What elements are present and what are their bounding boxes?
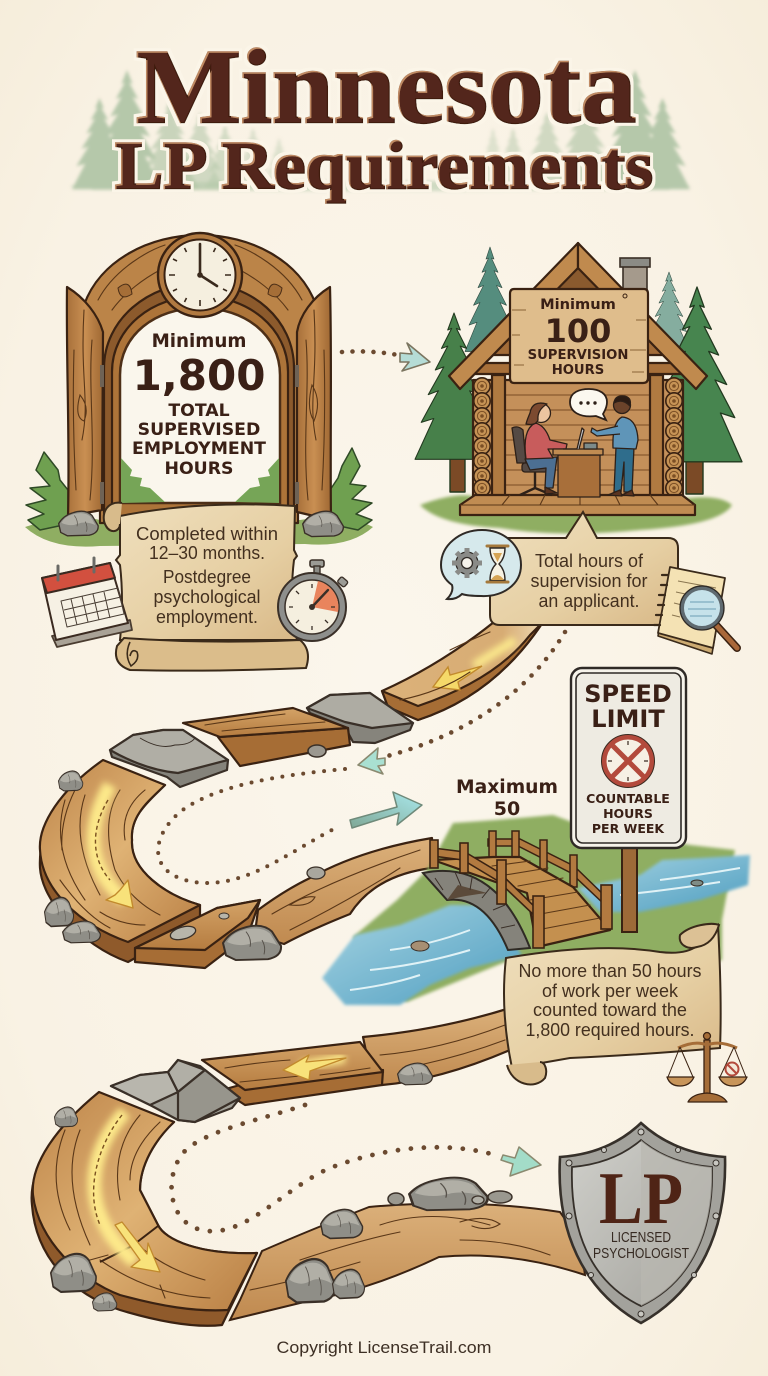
upper scroll curl: [104, 503, 122, 531]
stone outer: [44, 897, 74, 926]
text: minimum 1,800: [132, 331, 266, 479]
text: minimum 1,800: TOTAL: [168, 401, 230, 421]
callout text: Total hours of: [535, 550, 644, 571]
icon: gear and hourglass bubble: [441, 530, 521, 599]
road: upper plank and stones: [110, 622, 543, 787]
arrow: to shield: [501, 1147, 541, 1176]
stone arch: [423, 871, 530, 950]
callout text: [530, 550, 648, 611]
bridge back rail: [488, 831, 607, 905]
stones at doorposts: [59, 511, 98, 536]
text: maximum 50: 50: [494, 798, 520, 820]
panel: callout total hours: [490, 512, 678, 625]
hourglass: [487, 546, 508, 582]
clock: [158, 233, 242, 317]
icon: notebook and magnifier: [654, 567, 737, 654]
speed limit sign: [571, 668, 686, 932]
laptop and desk: [553, 428, 603, 497]
shield text: PSYCHOLOGIST: [593, 1245, 689, 1262]
wooden sign: minimum 100: HOURS: [552, 363, 604, 378]
stone slab: [307, 693, 413, 743]
stone outer low: [63, 921, 100, 943]
sign text top: LIMIT: [591, 705, 665, 733]
final road to shield: [230, 1203, 585, 1320]
text: maximum 50: Maximum: [456, 777, 558, 798]
icon: stopwatch: [278, 560, 348, 641]
left door: [67, 287, 104, 516]
text: minimum 1,800: Minimum: [152, 331, 246, 352]
scroll text: No more than 50 hours: [518, 960, 702, 981]
no-clock symbol: [602, 734, 654, 788]
panel: cabin with 100 supervision hours: [415, 243, 742, 534]
dotted trail section 3: [172, 1105, 541, 1231]
wooden arch: [84, 235, 316, 523]
sign face: [571, 668, 686, 848]
icon: calendar: [42, 558, 132, 647]
inner bushes: [121, 458, 279, 503]
road: plank and stone toward bridge: [135, 838, 432, 968]
text: maximum 50: [456, 777, 558, 820]
wooden sign: minimum 100: 100: [545, 312, 611, 350]
callout text: supervision for: [530, 570, 648, 591]
rivets: [566, 1129, 719, 1317]
wooden sign: minimum 100: [510, 289, 648, 383]
stones on second bend: [54, 1107, 78, 1127]
stone outer large: [51, 1254, 96, 1292]
road: first bend: [40, 760, 200, 962]
road: lower section: [32, 1008, 585, 1326]
panel: 12–30 months scroll: [104, 503, 308, 671]
top right curl: [680, 924, 719, 948]
bottom roll: [116, 638, 308, 671]
grass banks: [353, 815, 735, 1002]
title: [115, 28, 653, 203]
shield text: LP: [599, 1158, 683, 1240]
plank leading from callout: [382, 622, 543, 720]
river right: [578, 855, 750, 912]
sign text bottom: [586, 791, 670, 836]
scroll text: 12–30 months.: [149, 542, 265, 563]
scroll text: [136, 523, 278, 627]
river scene with bridge: [322, 815, 750, 1005]
scroll text: of work per week: [542, 980, 679, 1001]
dotted trail section 2: [158, 632, 565, 883]
speech bubble: [570, 389, 607, 420]
wooden sign: minimum 100: Minimum: [540, 296, 616, 313]
bottom left curl: [507, 1062, 546, 1084]
panel: 1,800 hours archway: [25, 233, 373, 547]
title: LP Requirements: [115, 127, 653, 203]
stone right: [303, 511, 343, 537]
chimney: [620, 258, 650, 302]
scroll text: 1,800 required hours.: [526, 1019, 694, 1040]
stone outer small: [92, 1293, 117, 1311]
stone low: [286, 1259, 335, 1303]
title: Minnesota: [136, 28, 636, 145]
scroll text: counted toward the: [533, 999, 687, 1020]
man standing: [591, 396, 638, 496]
text: minimum 1,800: HOURS: [165, 459, 233, 479]
back pines: [465, 247, 690, 352]
text: minimum 1,800: EMPLOYMENT: [132, 439, 266, 459]
text: minimum 1,800: SUPERVISED: [138, 420, 260, 440]
scroll text: psychological: [154, 586, 260, 607]
glowing arrow on second bend: [94, 1112, 160, 1272]
callout text: an applicant.: [538, 590, 640, 611]
stones on bend: [58, 771, 83, 791]
plank into scroll: [363, 1008, 510, 1085]
copyright: Copyright LicenseTrail.com: [276, 1338, 492, 1357]
bridge front rail: [430, 840, 612, 948]
bridge deck: [433, 857, 610, 947]
panel: 50 hours scroll: [504, 924, 721, 1084]
ground and bushes: [25, 448, 373, 547]
wood plank: [183, 708, 350, 766]
grass under cabin: [420, 495, 732, 534]
sign text bottom: PER WEEK: [592, 821, 665, 836]
small stones: [388, 1191, 512, 1205]
sign text bottom: COUNTABLE: [586, 791, 670, 806]
wooden sign: minimum 100: SUPERVISION: [528, 348, 628, 363]
scroll text: Postdegree: [163, 566, 251, 587]
dotted arrow to cabin: [342, 343, 430, 371]
stones on final road: [409, 1178, 488, 1210]
stone low right: [333, 1269, 364, 1298]
rock on plank: [398, 1063, 432, 1085]
arrow: left-pointing: [358, 748, 385, 774]
text: minimum 1,800: 1,800: [133, 351, 265, 400]
front pines: [415, 287, 742, 494]
roof: [449, 243, 707, 389]
sign text bottom: HOURS: [603, 806, 653, 821]
sign text top: SPEED: [584, 680, 672, 708]
sign post: [622, 848, 637, 932]
shield text: LICENSED: [611, 1229, 671, 1246]
second bend: [32, 1092, 257, 1326]
stones: [111, 1060, 240, 1122]
scroll text: employment.: [156, 606, 258, 627]
arrow: right-pointing: [350, 792, 422, 828]
plank with arrow: [202, 1042, 383, 1105]
icon: scales: [667, 1032, 747, 1102]
forest behind title: [70, 70, 690, 191]
stone beside: [321, 1209, 363, 1238]
sign text top: [584, 680, 672, 733]
sign inner border: [576, 673, 681, 843]
scroll text: Completed within: [136, 523, 278, 544]
cabin body: [473, 250, 683, 497]
scroll text: [518, 960, 702, 1040]
river left: [322, 905, 522, 1005]
shield: licensed psychologist: [560, 1123, 725, 1323]
glowing arrow on bend: [94, 785, 133, 908]
right door: [295, 287, 331, 520]
deck: [460, 495, 695, 515]
woman at desk: [512, 403, 567, 495]
gear: [452, 548, 482, 578]
stone slab left: [110, 730, 228, 787]
